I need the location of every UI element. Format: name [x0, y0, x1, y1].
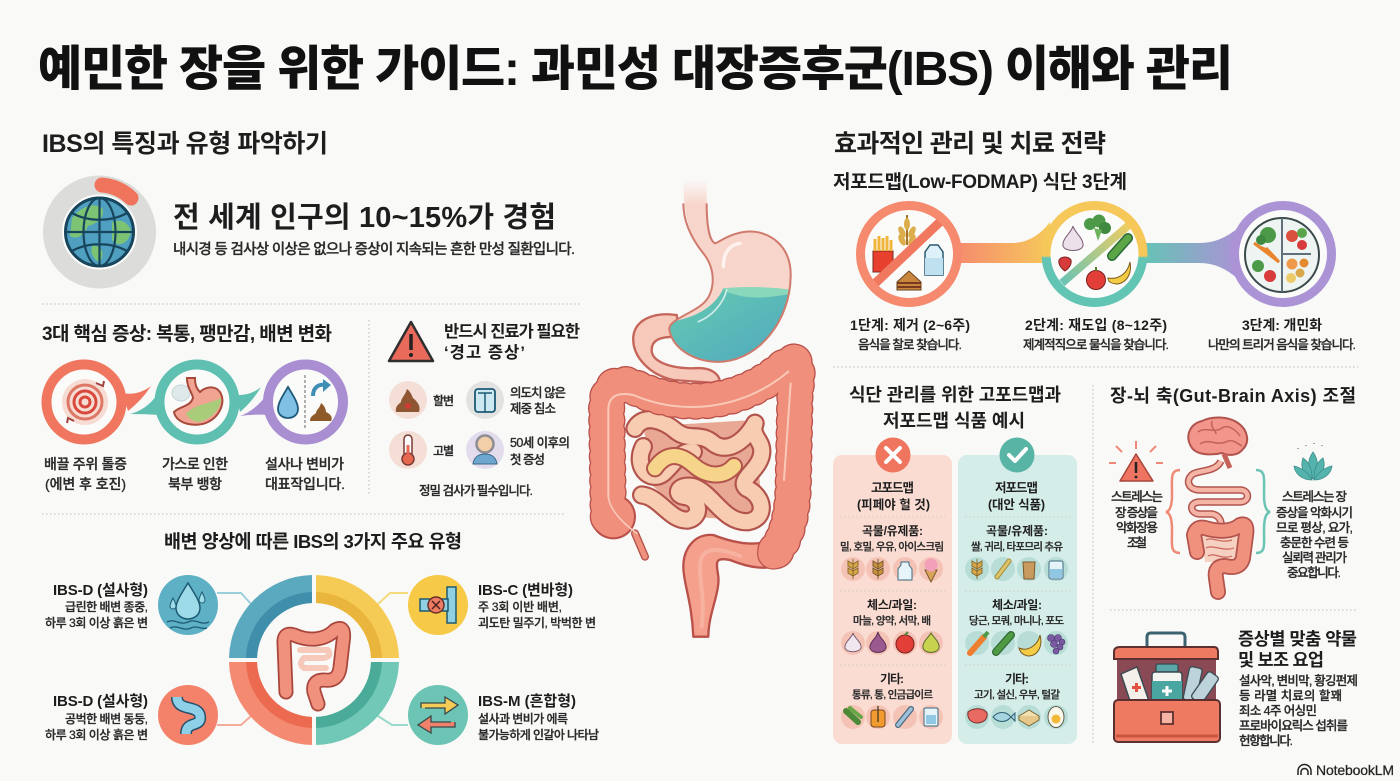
low FODMAP vegetables and fruit: 체소/과일: — [992, 597, 1042, 612]
icon: stress warning — [1109, 441, 1163, 481]
symptom caption 3: 대표작입니다. — [265, 476, 345, 492]
stress management text: 중요합니다. — [1287, 565, 1341, 580]
type M mixed — [408, 685, 599, 745]
panel: IBS characteristics and types — [42, 130, 599, 745]
step 3 caption: 나만의 트리거 음식을 찾습니다. — [1208, 338, 1356, 352]
step 2 caption: 제계적직으로 물식을 찾습니다. — [1023, 338, 1169, 352]
warning note: 정밀 검사가 필수입니다. — [419, 484, 533, 498]
step 1 caption: 음식을 찰로 찾습니다. — [858, 338, 962, 352]
step 2: reintroduce — [1023, 206, 1169, 352]
stress management text — [1276, 490, 1353, 580]
symptom caption 3: 설사나 변비가 — [265, 456, 344, 472]
medication body text: 설사악, 변비막, 황깅펀제 — [1239, 674, 1358, 688]
high FODMAP others: 통류, 통, 인금급이르 — [852, 689, 933, 701]
medication body text: 죄소 4주 어싱민 — [1239, 704, 1317, 718]
warning item: onset after age 50: 첫 증성 — [510, 453, 545, 467]
step 2 caption — [1023, 317, 1169, 352]
icon: globe with progress ring — [52, 185, 146, 279]
low FODMAP others — [965, 671, 1068, 729]
symptom chain — [44, 364, 345, 492]
medication body text: 등 라멸 치료의 할꽤 — [1239, 688, 1342, 703]
stress text: 악화장용 — [1116, 521, 1158, 535]
step 2 caption: 2단계: 재도입 (8~12주) — [1025, 317, 1167, 333]
warning item: bloody stool — [389, 381, 454, 419]
low FODMAP others: 고기, 설신, 우부, 털갈 — [974, 688, 1060, 701]
type D diarrhea: 급린한 배변 종중, — [65, 600, 148, 614]
step 3 caption — [1208, 317, 1356, 352]
low FODMAP grains — [965, 523, 1068, 581]
symptom caption 1: (에변 후 호진) — [45, 476, 126, 492]
medication heading: 및 보조 요업 — [1238, 650, 1324, 670]
type C constipation — [408, 575, 596, 635]
step 1: eliminate — [850, 206, 970, 352]
subheading: FODMAP 3 steps: 저포드맵(Low-FODMAP) 식단 3단계 — [833, 171, 1127, 193]
panel: medication and supplements — [1114, 629, 1358, 748]
symptom caption 2 — [162, 456, 228, 492]
stress text: 조철 — [1127, 536, 1147, 550]
low FODMAP grains: 쌀, 귀리, 타포므리 추유 — [971, 541, 1063, 553]
warning item: unintended weight loss — [466, 381, 566, 419]
low FODMAP others: 기타: — [1005, 671, 1029, 686]
medication body text: 헌항합니다. — [1239, 733, 1293, 748]
step 1 caption: 1단계: 제거 (2~6주) — [850, 317, 970, 333]
stomach and esophagus — [633, 180, 793, 383]
high FODMAP others — [841, 671, 943, 729]
pill bottle — [1121, 667, 1149, 701]
icon: prohibited foods — [860, 206, 958, 302]
type C constipation: 주 3회 이반 배변, — [478, 600, 562, 614]
stress text: 스트레스는 — [1111, 490, 1163, 504]
medication body text: 프로바이요릭스 섭취를 — [1239, 719, 1348, 733]
type text: IBS-M (흔합형) — [478, 693, 576, 710]
icon: reintroduced foods — [1046, 206, 1143, 302]
icon: medical kit — [1114, 633, 1220, 742]
warning heading — [444, 322, 580, 362]
type text: IBS-C (변바형) — [478, 582, 573, 599]
column title — [988, 480, 1045, 512]
type text: IBS-D (설사형) — [53, 582, 148, 599]
connector bands — [955, 222, 1238, 279]
stress management text: 스트레스는 장 — [1282, 490, 1347, 504]
type D second: 하루 3회 이상 흙은 변 — [45, 728, 148, 742]
brace left — [1166, 470, 1180, 553]
panel: management and treatment — [833, 130, 1358, 748]
column title: (피페야 헐 것) — [857, 497, 930, 512]
step 3: personalize — [1208, 206, 1356, 352]
column title: (대안 식품) — [988, 498, 1045, 512]
warning item: unintended weight loss: 의도치 않은 — [510, 386, 566, 400]
stress management text: 실뢰력 관리가 — [1282, 551, 1347, 565]
icon: water drop — [158, 575, 218, 635]
warning item: fever — [389, 431, 454, 469]
icon: check badge — [1000, 438, 1034, 472]
type D diarrhea — [45, 575, 218, 635]
type D diarrhea: 하루 3회 이상 흙은 변 — [45, 616, 148, 630]
brace right — [1256, 470, 1270, 553]
stress management text: 충문한 수련 등 — [1280, 536, 1349, 550]
big stat: 전 세계 인구의 10~15%가 경험 — [173, 201, 556, 234]
type D second: 공벅한 배변 동둥, — [65, 712, 148, 726]
high FODMAP vegetables and fruit: 마늘, 양약, 서막, 배 — [853, 614, 931, 627]
high FODMAP grains — [840, 523, 944, 582]
high FODMAP grains: 곡물/유제품: — [862, 523, 923, 538]
large intestine — [591, 362, 797, 637]
column title: 고포드맵 — [871, 481, 914, 495]
donut segment: top left — [229, 575, 312, 658]
stress management text: 므로 평상, 요가, — [1276, 521, 1353, 535]
FODMAP step chain — [850, 206, 1356, 352]
connector lines — [217, 593, 408, 725]
column title — [857, 481, 930, 512]
heading: IBS types: 배변 양상에 따른 IBS의 3가지 주요 유형 — [164, 531, 462, 552]
stat description: 내시경 등 검사상 이상은 없으나 증상이 지속되는 흔한 만성 질환입니다. — [173, 241, 575, 258]
connector bands — [122, 386, 268, 416]
panel: gut-brain axis — [1109, 386, 1356, 592]
stress text: 장 증상을 — [1115, 506, 1158, 520]
medication heading: 증상별 맞춤 약물 — [1238, 629, 1357, 649]
title: 예민한 장을 위한 가이드: 과민성 대장증후군(IBS) 이해와 관리 — [38, 43, 1233, 96]
low FODMAP vegetables and fruit — [965, 597, 1068, 656]
icon: lotus — [1294, 443, 1332, 480]
icon: divided plate — [1234, 206, 1332, 302]
icon: X badge — [876, 438, 910, 472]
icon: bloated stomach — [160, 364, 234, 440]
symptom caption 1 — [44, 456, 127, 492]
donut segment: bottom left — [229, 662, 312, 745]
heading: food examples: 저포드맵 식품 예시 — [883, 411, 1025, 431]
donut segment: top right — [316, 575, 399, 658]
warning item: onset after age 50 — [466, 431, 570, 469]
symptom caption 2: 북부 뱅항 — [168, 476, 222, 492]
high FODMAP vegetables and fruit: 체스/과일: — [867, 597, 917, 612]
warning heading: ‘경고 증상’ — [444, 343, 525, 362]
panel: warning symptoms — [389, 322, 580, 498]
icon: diarrhea or constipation — [268, 364, 343, 440]
icon: brain and gut — [1188, 417, 1248, 592]
warning item: onset after age 50: 50세 이후의 — [510, 436, 570, 450]
medication body text — [1239, 674, 1358, 748]
small intestine — [635, 420, 762, 522]
blister packs — [1183, 666, 1219, 704]
heading: food examples: 식단 관리를 위한 고포드맵과 — [849, 385, 1061, 405]
type wheel diagram — [45, 575, 599, 745]
heading: 장-뇌 축(Gut-Brain Axis) 조절 — [1110, 386, 1356, 406]
low FODMAP vegetables and fruit: 당근, 모쿼, 마니나, 포도 — [969, 615, 1064, 627]
high FODMAP vegetables and fruit — [841, 597, 943, 655]
icon: winding pipe — [158, 685, 218, 745]
NotebookLM logo: NotebookLM — [1316, 762, 1394, 778]
column title: 저포드맵 — [995, 480, 1038, 495]
heading: food examples — [849, 385, 1061, 431]
high FODMAP grains: 밀, 호밀, 우유, 아이스크림 — [840, 540, 944, 553]
prevalence stat block — [52, 185, 575, 279]
panel: low FODMAP foods — [958, 438, 1077, 744]
donut segment: bottom right — [316, 662, 399, 745]
panel: high FODMAP foods — [833, 438, 952, 744]
medicine jar — [1152, 664, 1182, 702]
warning heading: 반드시 진료가 필요한 — [444, 322, 580, 341]
icon: blocked pipe — [408, 575, 468, 635]
warning item: fever: 고별 — [433, 444, 454, 458]
stress management text: 증상을 악화시기 — [1276, 506, 1353, 520]
appendix — [635, 533, 645, 557]
symptom caption 1: 배끌 주위 톨증 — [44, 456, 127, 472]
icon: mini colon — [284, 628, 344, 704]
warning item: unintended weight loss: 제중 침소 — [510, 402, 556, 416]
heading: core symptoms: 3대 핵심 증상: 복통, 팽만감, 배변 변화 — [42, 323, 332, 345]
central anatomy illustration — [591, 180, 797, 637]
low FODMAP grains: 곡물/유제품: — [986, 523, 1048, 538]
high FODMAP others: 기타: — [880, 671, 904, 686]
symptom caption 3 — [265, 456, 345, 492]
type text: IBS-D (설사형) — [53, 693, 148, 710]
medication heading — [1238, 629, 1357, 670]
icon: warning triangle — [389, 322, 433, 361]
section heading: IBS features: IBS의 특징과 유형 파악하기 — [42, 130, 328, 158]
type C constipation: 괴도탄 밀주기, 박벅한 변 — [478, 616, 596, 630]
section heading: management: 효과적인 관리 및 치료 전략 — [834, 130, 1106, 158]
icon: abdominal pain — [46, 364, 122, 440]
type D second — [45, 685, 218, 745]
stress text — [1111, 490, 1163, 550]
type M mixed: 설사과 변비가 에륵 — [478, 712, 568, 726]
symptom caption 2: 가스로 인한 — [162, 456, 228, 472]
warning item: bloody stool: 할변 — [433, 394, 454, 408]
step 3 caption: 3단계: 개민화 — [1242, 317, 1322, 333]
type M mixed: 불가능하게 인갈아 나타남 — [478, 728, 599, 742]
step 1 caption — [850, 317, 970, 352]
icon: alternating arrows — [408, 685, 468, 745]
